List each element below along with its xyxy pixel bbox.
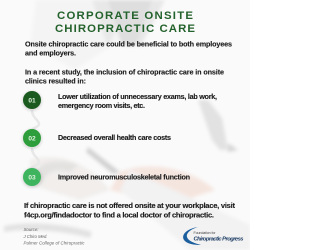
step 2 badge: 02 [28, 135, 36, 142]
step 2 [22, 129, 171, 148]
closing call to action: f4cp.org/findadoctor to find a local doctor of chiropractic. [24, 210, 214, 220]
logo: Foundation for Chiropractic Progress [183, 227, 244, 245]
step 2 text: Decreased overall health care costs [58, 133, 171, 142]
step 1 text [58, 92, 217, 110]
source note: J Chiro Med. [22, 234, 48, 239]
closing call to action: If chiropractic care is not offered onsite at your workplace, visit [24, 201, 235, 210]
step 3 text: Improved neuromusculoskeletal function [58, 172, 190, 182]
timeline connector [32, 110, 39, 168]
step 3 badge [22, 168, 42, 188]
background photo: faded doctor and desk [0, 0, 250, 250]
logo swoosh [183, 227, 201, 245]
step 1 text: emergency room visits, etc. [58, 101, 145, 110]
step 2 badge [22, 129, 42, 148]
source note [22, 227, 85, 246]
step 3 [22, 168, 190, 188]
source note: Source: [24, 227, 39, 232]
step 1 text: Lower utilization of unnecessary exams, lab work, [58, 92, 217, 101]
logo wordmark: Chiropractic Progress [194, 236, 244, 242]
logo wordmark [194, 231, 244, 242]
closing call to action [24, 201, 235, 220]
logo wordmark: Foundation for [194, 231, 216, 235]
step 3 badge: 03 [28, 174, 36, 181]
intro text block: Onsite chiropractic care could be beneficial to both employees [25, 40, 232, 48]
step 1 badge: 01 [28, 97, 36, 104]
intro text block: and employers. [25, 48, 76, 58]
source note: Palmer College of Chiropractic [24, 240, 85, 246]
step 1 badge [22, 91, 42, 110]
intro text block: clinics resulted in: [25, 76, 86, 86]
title: CHIROPRACTIC CARE [55, 23, 195, 35]
intro text block [25, 40, 232, 86]
title [55, 10, 195, 35]
title: CORPORATE ONSITE [57, 10, 193, 22]
step 1 [22, 91, 217, 110]
intro text block: In a recent study, the inclusion of chiropractic care in onsite [25, 68, 224, 76]
